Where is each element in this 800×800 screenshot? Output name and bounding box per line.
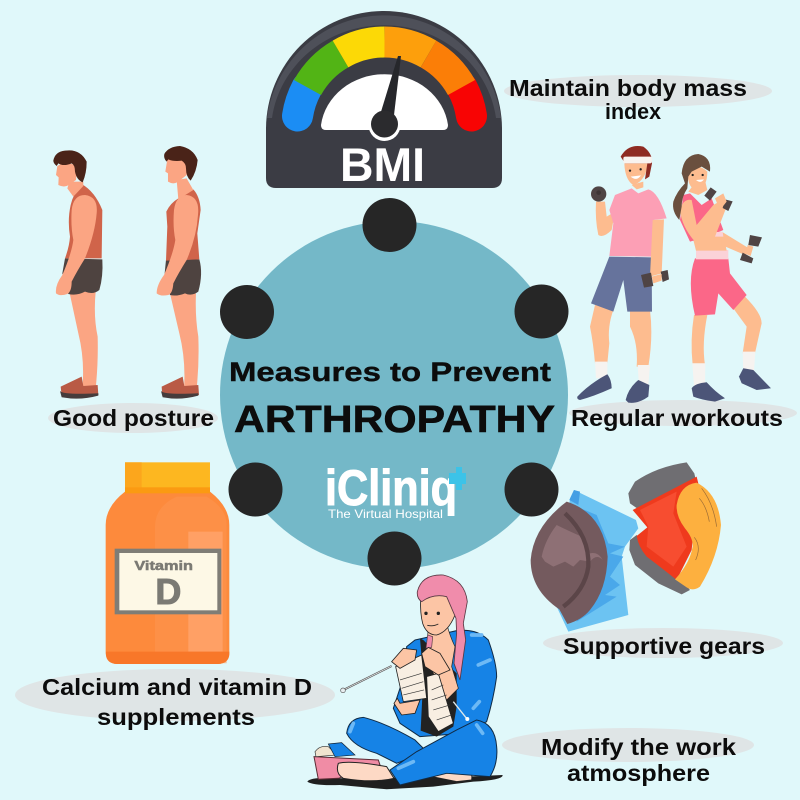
icon: woman knitting: [307, 575, 503, 789]
icon: vitamin D bottle: Vitamin: [134, 558, 193, 573]
icon: posture figure upright: [157, 146, 201, 399]
icon: BMI gauge: [266, 11, 502, 191]
knitting: [396, 655, 453, 732]
icon: posture figure slouching: [53, 150, 103, 399]
icon: BMI gauge: BMI: [340, 138, 425, 191]
logo: iCliniq: iCliniq: [325, 460, 457, 516]
knitting needles: [341, 666, 469, 721]
heading: arthropathy: ARTHROPATHY: [234, 399, 555, 441]
icon: man with dumbbells: [577, 146, 669, 403]
label: regular workouts: Regular workouts: [571, 405, 783, 431]
label: modify the work atmosphere: [502, 728, 754, 786]
label: supportive gears: [543, 628, 783, 659]
ground shadow: [307, 775, 503, 789]
label: supportive gears: Supportive gears: [563, 633, 765, 659]
icon: vitamin D bottle: D: [155, 571, 181, 612]
pink hair with braid: [417, 575, 467, 680]
panel: central circle: [220, 221, 568, 569]
label: calcium and vitamin D supplements: supplements: [97, 704, 255, 730]
black shirt: [420, 638, 457, 737]
robe torso: [393, 630, 497, 737]
label: maintain body mass index: [504, 75, 772, 124]
heading: measures to prevent: Measures to Prevent: [229, 357, 551, 387]
crossed legs: [347, 717, 425, 763]
label: calcium and vitamin D supplements: Calcium and vitamin D: [42, 674, 312, 700]
hands and arms: [392, 647, 450, 715]
icon: supportive knee pads: [531, 462, 721, 632]
chest and head: [427, 623, 458, 700]
yarn basket: [314, 743, 380, 779]
label: maintain body mass index: Maintain body mass: [509, 75, 747, 101]
label: good posture: Good posture: [53, 405, 214, 431]
icon: vitamin D bottle: [106, 462, 229, 664]
icon: woman with dumbbells: [673, 154, 771, 402]
feet: [337, 762, 472, 782]
label: modify the work atmosphere: Modify the work: [541, 734, 736, 760]
label: calcium and vitamin D supplements: [15, 669, 335, 730]
label: modify the work atmosphere: atmosphere: [567, 760, 710, 786]
logo: iCliniq: The Virtual Hospital: [328, 507, 443, 521]
label: maintain body mass index: index: [605, 99, 662, 124]
connector dots: [220, 198, 568, 586]
